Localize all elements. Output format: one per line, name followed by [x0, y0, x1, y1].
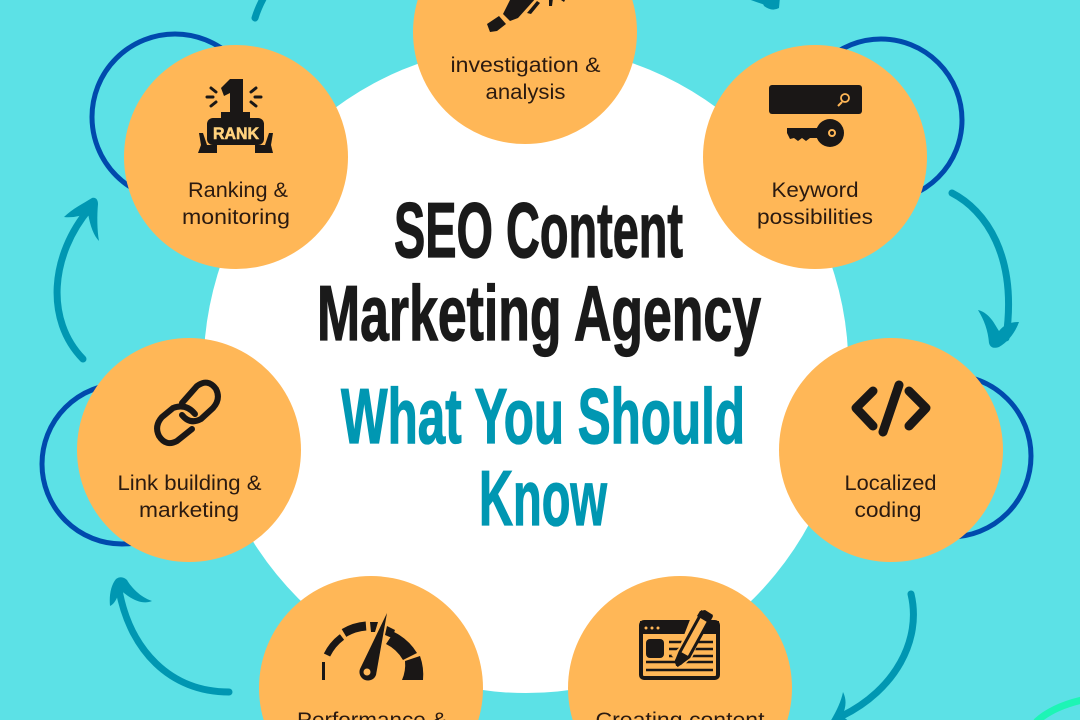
icon: rank one: RANK: [213, 124, 260, 143]
blue arc: keyword: [800, 39, 962, 201]
icon: rank one: [198, 79, 273, 153]
icon: hand with magnifier: [487, 0, 566, 32]
corner green arc: [1036, 700, 1080, 720]
label: marketing: [139, 499, 239, 522]
arrow: coding to content: [830, 594, 913, 720]
title: SEO Content: [394, 186, 683, 274]
label: Keyword: [772, 179, 858, 202]
label: coding: [854, 499, 922, 522]
arrow: top right stub: [745, 0, 780, 10]
arrow: link to ranking: [57, 198, 99, 359]
node: link building: [77, 338, 301, 562]
label: Ranking &: [188, 179, 288, 202]
arrow: keyword to coding: [952, 193, 1019, 348]
label: analysis: [486, 81, 566, 104]
label: investigation &: [450, 54, 600, 77]
blue arc: coding: [869, 375, 1031, 537]
label: monitoring: [182, 206, 290, 229]
icon: chain link: [157, 383, 218, 443]
blue arc: ranking: [92, 34, 258, 200]
icon: browser with pencil: [640, 610, 719, 678]
subtitle: Know: [479, 454, 607, 542]
blue arc: link building: [42, 384, 202, 544]
subtitle: What You Should: [341, 372, 745, 460]
central white circle: [204, 45, 848, 693]
node: keyword possibilities: [703, 45, 927, 269]
arrow: top left stub: [255, 0, 264, 18]
node: localized coding: [779, 338, 1003, 562]
node: investigation & analysis: [413, 0, 637, 144]
icon: search bar and key: [769, 85, 862, 147]
node: creating content: [568, 576, 792, 720]
node: performance: [259, 576, 483, 720]
arrow: performance to link: [110, 577, 229, 692]
label: Localized: [844, 472, 936, 495]
label: possibilities: [757, 206, 873, 229]
title: Marketing Agency: [317, 269, 761, 357]
node: ranking: [124, 45, 348, 269]
icon: code brackets: [856, 385, 926, 432]
icon: speedometer gauge: [324, 613, 423, 681]
label: Link building &: [118, 472, 262, 495]
